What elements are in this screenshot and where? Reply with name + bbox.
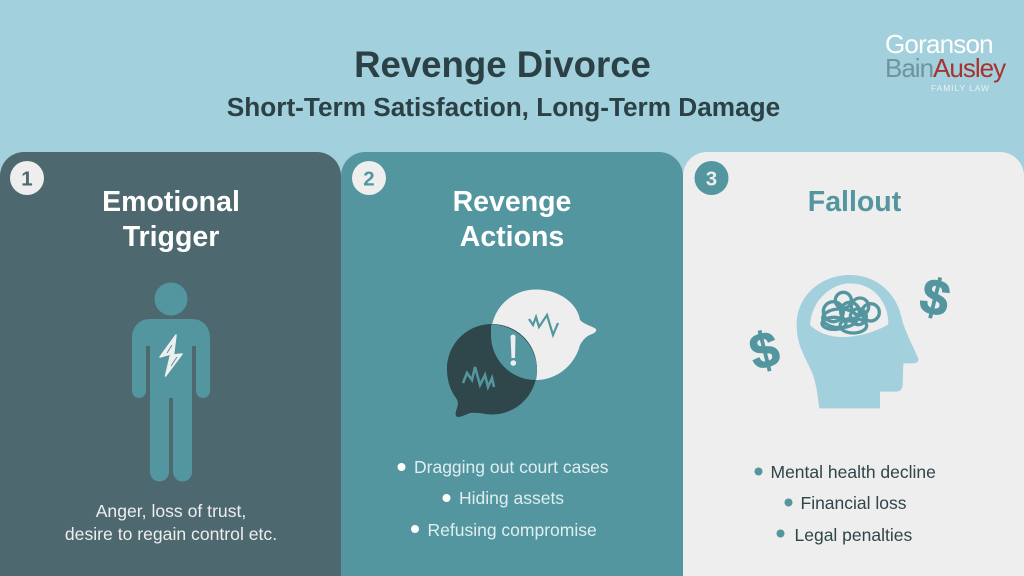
- bullet list: revenge actions: [398, 457, 609, 540]
- title: Revenge Divorce: [354, 44, 651, 85]
- bullet list: fallout: [754, 462, 936, 545]
- heading: fallout: Fallout: [808, 186, 902, 218]
- bullet list: fallout: Legal penalties: [794, 525, 912, 545]
- bullet list: fallout: Mental health decline: [770, 462, 936, 482]
- icon: person with lightning bolt: [132, 282, 210, 482]
- bullet list: revenge actions: Dragging out court cases: [414, 457, 609, 477]
- step number 2: [352, 161, 386, 195]
- bullet list: fallout: Financial loss: [800, 493, 907, 513]
- subtitle: Short-Term Satisfaction, Long-Term Damage: [227, 92, 780, 122]
- icon: exclamation mark: [510, 334, 516, 358]
- icon: dollar sign right: $: [915, 267, 956, 328]
- heading: revenge actions: Revenge: [453, 186, 571, 218]
- logo: FAMILY LAW: [931, 83, 990, 93]
- logo: Goranson: [885, 29, 993, 59]
- heading: emotional trigger: Trigger: [123, 221, 219, 253]
- icon: dollar sign left: $: [744, 320, 785, 381]
- bullet list: revenge actions: Hiding assets: [459, 488, 564, 508]
- step number 2: 2: [363, 168, 375, 190]
- heading: emotional trigger: Emotional: [102, 186, 240, 218]
- bullet list: revenge actions: Refusing compromise: [428, 520, 597, 540]
- description: desire to regain control etc.: [65, 524, 277, 544]
- logo: BainAusley: [885, 53, 1006, 83]
- panel: fallout: [683, 152, 1024, 576]
- step number 1: 1: [21, 168, 33, 190]
- icon: head with tangled brain: [797, 275, 918, 408]
- description: Anger, loss of trust,: [96, 501, 246, 521]
- icon: speech bubbles: [447, 290, 596, 417]
- panel: emotional trigger: [0, 152, 341, 576]
- step number 1: [10, 161, 44, 195]
- logo: [885, 29, 1006, 93]
- panel: revenge actions: [341, 152, 683, 576]
- heading: revenge actions: Actions: [460, 221, 564, 253]
- step number 3: 3: [706, 168, 717, 190]
- step number 3: [694, 161, 728, 195]
